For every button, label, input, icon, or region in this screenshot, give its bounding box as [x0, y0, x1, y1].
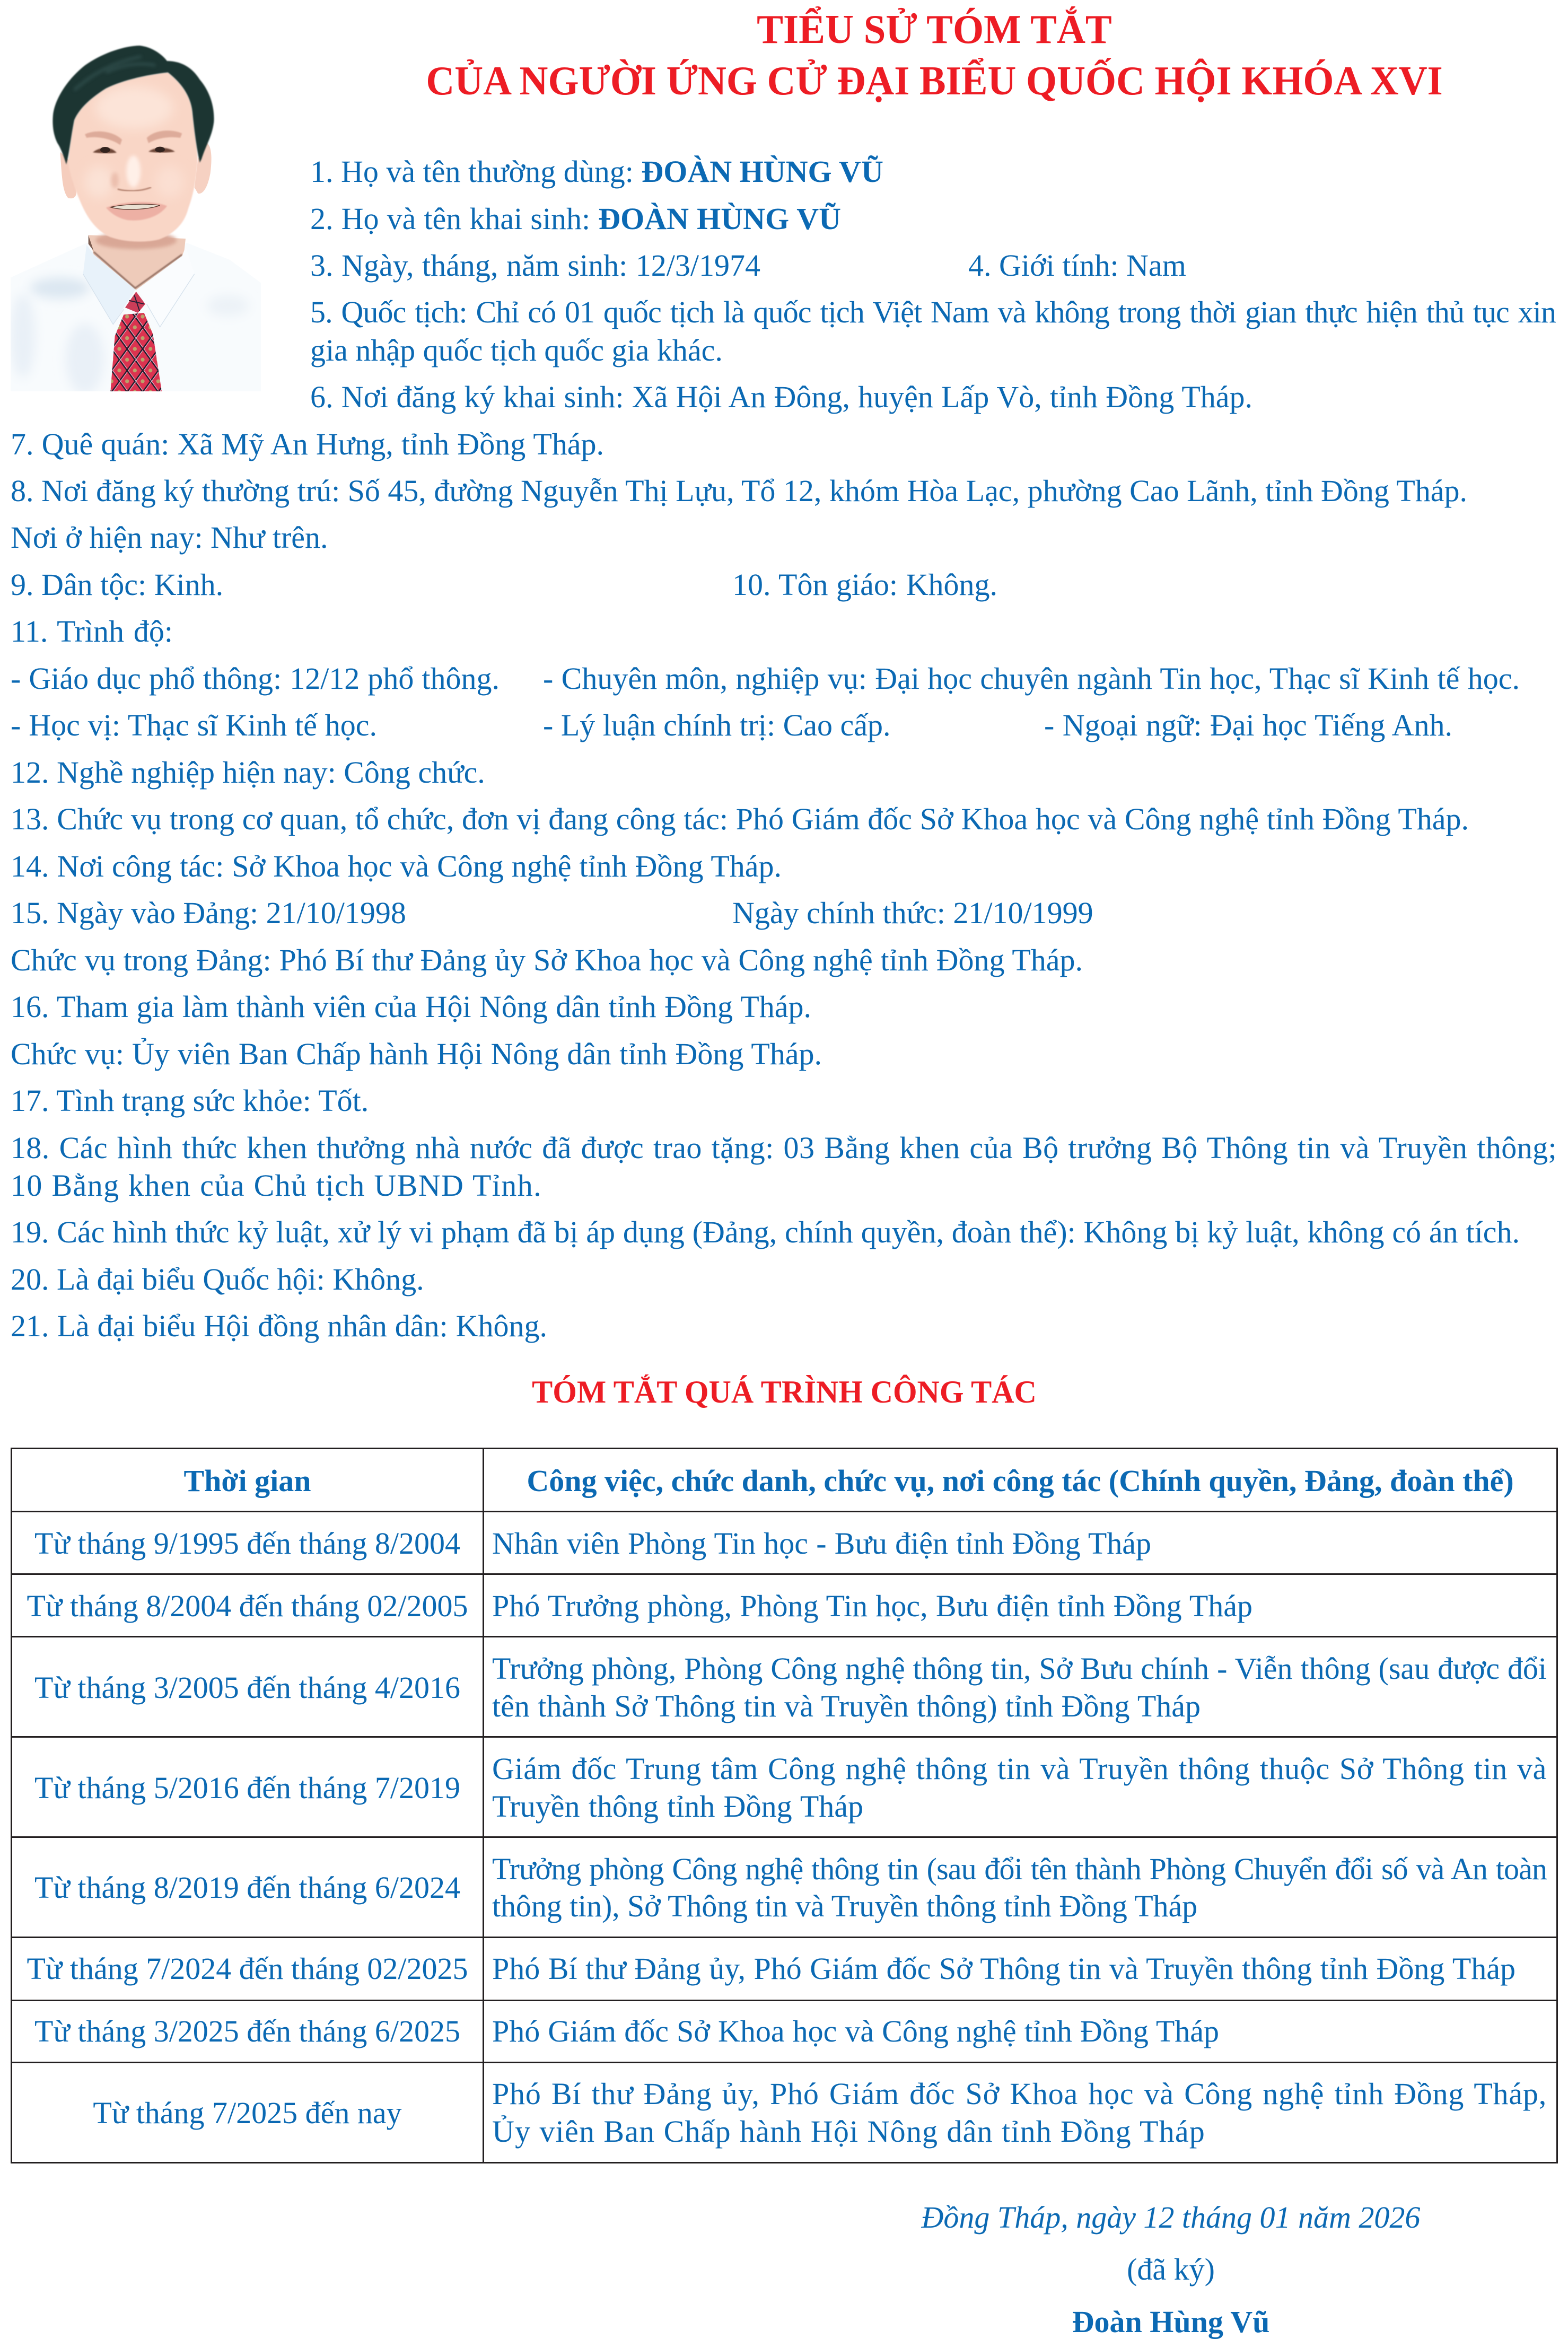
personal information list: 4. Giới tính: Nam	[968, 248, 1186, 283]
row 6: Phó Bí thư Đảng ủy, Phó Giám đốc Sở Thông tin và Truyền thông tỉnh Đồng Tháp	[492, 1951, 1516, 1986]
row 1: Từ tháng 9/1995 đến tháng 8/2004	[34, 1526, 460, 1561]
hair	[52, 46, 214, 164]
signature block	[921, 2200, 1420, 2339]
row 6: Từ tháng 7/2024 đến tháng 02/2025	[27, 1951, 468, 1986]
row 7: Phó Giám đốc Sở Khoa học và Công nghệ tỉnh Đồng Tháp	[492, 2014, 1219, 2048]
table header row: Công việc, chức danh, chức vụ, nơi công tác (Chính quyền, Đảng, đoàn thể)	[527, 1464, 1514, 1498]
personal information list: - Lý luận chính trị: Cao cấp.	[543, 708, 891, 742]
personal information list: 10. Tôn giáo: Không.	[732, 567, 997, 602]
row 1	[12, 1512, 1556, 1575]
personal information list: Nơi ở hiện nay: Như trên.	[11, 520, 328, 555]
neck	[89, 232, 186, 290]
personal information list: - Giáo dục phổ thông: 12/12 phổ thông.	[11, 661, 500, 696]
face	[68, 73, 198, 242]
shirt	[11, 269, 255, 391]
necktie	[110, 292, 162, 391]
mouth	[106, 202, 167, 221]
row 2	[12, 1575, 1556, 1637]
row 5	[12, 1838, 1556, 1938]
personal information list: 16. Tham gia làm thành viên của Hội Nông dân tỉnh Đồng Tháp.	[11, 989, 811, 1024]
title	[426, 6, 1443, 103]
personal information list: 21. Là đại biểu Hội đồng nhân dân: Không.	[11, 1309, 547, 1343]
row 7	[12, 2001, 1556, 2063]
personal information list: 11. Trình độ:	[11, 614, 173, 649]
personal information list: Ngày chính thức: 21/10/1999	[732, 896, 1093, 930]
row 6	[12, 1938, 1556, 2001]
personal information list: 15. Ngày vào Đảng: 21/10/1998	[11, 896, 406, 930]
row 4: Truyền thông tỉnh Đồng Tháp	[492, 1789, 863, 1824]
row 4: Giám đốc Trung tâm Công nghệ thông tin và Truyền thông thuộc Sở Thông tin và	[492, 1751, 1547, 1786]
personal information list: 8. Nơi đăng ký thường trú: Số 45, đường Nguyễn Thị Lựu, Tổ 12, khóm Hòa Lạc, phường Cao Lãnh, tỉnh Đồng Tháp.	[11, 474, 1467, 508]
personal information list: 2. Họ và tên khai sinh: ĐOÀN HÙNG VŨ	[310, 202, 841, 236]
collar	[83, 245, 195, 327]
row 4: Từ tháng 5/2016 đến tháng 7/2019	[34, 1771, 460, 1805]
eyebrows and eyes	[85, 130, 182, 153]
personal information list: 19. Các hình thức kỷ luật, xử lý vi phạm đã bị áp dụng (Đảng, chính quyền, đoàn thể): Không bị kỷ luật, không có án tích.	[11, 1215, 1520, 1249]
row 3: Từ tháng 3/2005 đến tháng 4/2016	[34, 1670, 460, 1705]
table header row	[12, 1449, 1556, 1512]
table header row: Thời gian	[183, 1464, 311, 1498]
personal information list	[11, 154, 1557, 1343]
row 5: Từ tháng 8/2019 đến tháng 6/2024	[34, 1870, 460, 1905]
row 3: Trưởng phòng, Phòng Công nghệ thông tin, Sở Bưu chính - Viễn thông (sau được đổi	[492, 1651, 1547, 1686]
row 8: Phó Bí thư Đảng ủy, Phó Giám đốc Sở Khoa học và Công nghệ tỉnh Đồng Tháp,	[492, 2077, 1547, 2111]
title: TIỂU SỬ TÓM TẮT	[757, 6, 1112, 52]
personal information list: 1. Họ và tên thường dùng: ĐOÀN HÙNG VŨ	[310, 154, 883, 189]
signature block: (đã ký)	[1127, 2252, 1215, 2287]
personal information list: - Ngoại ngữ: Đại học Tiếng Anh.	[1044, 708, 1452, 742]
row 8: Từ tháng 7/2025 đến nay	[93, 2096, 402, 2130]
personal information list: 3. Ngày, tháng, năm sinh: 12/3/1974	[310, 248, 760, 283]
work history table	[11, 1448, 1558, 2163]
personal information list: - Học vị: Thạc sĩ Kinh tế học.	[11, 708, 377, 742]
title: CỦA NGƯỜI ỨNG CỬ ĐẠI BIỂU QUỐC HỘI KHÓA XVI	[426, 57, 1443, 103]
signature block: Đồng Tháp, ngày 12 tháng 01 năm 2026	[922, 2200, 1420, 2235]
row 2: Phó Trưởng phòng, Phòng Tin học, Bưu điện tỉnh Đồng Tháp	[492, 1589, 1252, 1623]
personal information list: 5. Quốc tịch: Chỉ có 01 quốc tịch là quốc tịch Việt Nam và không trong thời gian thực hiện thủ tục xin	[310, 295, 1556, 329]
personal information list: 10 Bằng khen của Chủ tịch UBND Tỉnh.	[11, 1168, 542, 1203]
personal information list: 13. Chức vụ trong cơ quan, tổ chức, đơn vị đang công tác: Phó Giám đốc Sở Khoa học và Công nghệ tỉnh Đồng Tháp.	[11, 802, 1469, 836]
row 7: Từ tháng 3/2025 đến tháng 6/2025	[34, 2014, 460, 2048]
row 3	[12, 1637, 1556, 1738]
personal information list: 20. Là đại biểu Quốc hội: Không.	[11, 1262, 424, 1296]
nose	[111, 155, 151, 191]
personal information list: 12. Nghề nghiệp hiện nay: Công chức.	[11, 755, 485, 790]
personal information list: 18. Các hình thức khen thưởng nhà nước đã được trao tặng: 03 Bằng khen của Bộ trưởng Bộ Thông tin và Truyền thông;	[11, 1131, 1557, 1165]
row 8: Ủy viên Ban Chấp hành Hội Nông dân tỉnh Đồng Tháp	[492, 2114, 1205, 2149]
row 1: Nhân viên Phòng Tin học - Bưu điện tỉnh Đồng Tháp	[492, 1526, 1151, 1561]
personal information list: 17. Tình trạng sức khỏe: Tốt.	[11, 1083, 369, 1118]
row 3: tên thành Sở Thông tin và Truyền thông) tỉnh Đồng Tháp	[492, 1689, 1201, 1723]
personal information list: 6. Nơi đăng ký khai sinh: Xã Hội An Đông, huyện Lấp Vò, tỉnh Đồng Tháp.	[310, 380, 1252, 414]
section heading: work history: TÓM TẮT QUÁ TRÌNH CÔNG TÁC	[532, 1374, 1037, 1409]
personal information list: gia nhập quốc tịch quốc gia khác.	[310, 333, 723, 367]
row 8	[93, 2063, 1547, 2162]
personal information list: Chức vụ: Ủy viên Ban Chấp hành Hội Nông dân tỉnh Đồng Tháp.	[11, 1037, 822, 1071]
personal information list: 14. Nơi công tác: Sở Khoa học và Công nghệ tỉnh Đồng Tháp.	[11, 849, 782, 883]
personal information list: 7. Quê quán: Xã Mỹ An Hưng, tỉnh Đồng Tháp.	[11, 427, 604, 461]
personal information list: Chức vụ trong Đảng: Phó Bí thư Đảng ủy Sở Khoa học và Công nghệ tỉnh Đồng Tháp.	[11, 943, 1083, 977]
row 4	[12, 1738, 1556, 1838]
row 2: Từ tháng 8/2004 đến tháng 02/2005	[27, 1589, 468, 1623]
row 5: Trưởng phòng Công nghệ thông tin (sau đổi tên thành Phòng Chuyển đổi số và An toàn	[492, 1852, 1547, 1886]
row 5: thông tin), Sở Thông tin và Truyền thông tỉnh Đồng Tháp	[492, 1889, 1197, 1923]
portrait photo	[11, 45, 255, 391]
ears	[60, 142, 212, 198]
personal information list: 9. Dân tộc: Kinh.	[11, 567, 223, 602]
personal information list: - Chuyên môn, nghiệp vụ: Đại học chuyên ngành Tin học, Thạc sĩ Kinh tế học.	[543, 661, 1520, 696]
signature block: Đoàn Hùng Vũ	[1072, 2305, 1269, 2339]
